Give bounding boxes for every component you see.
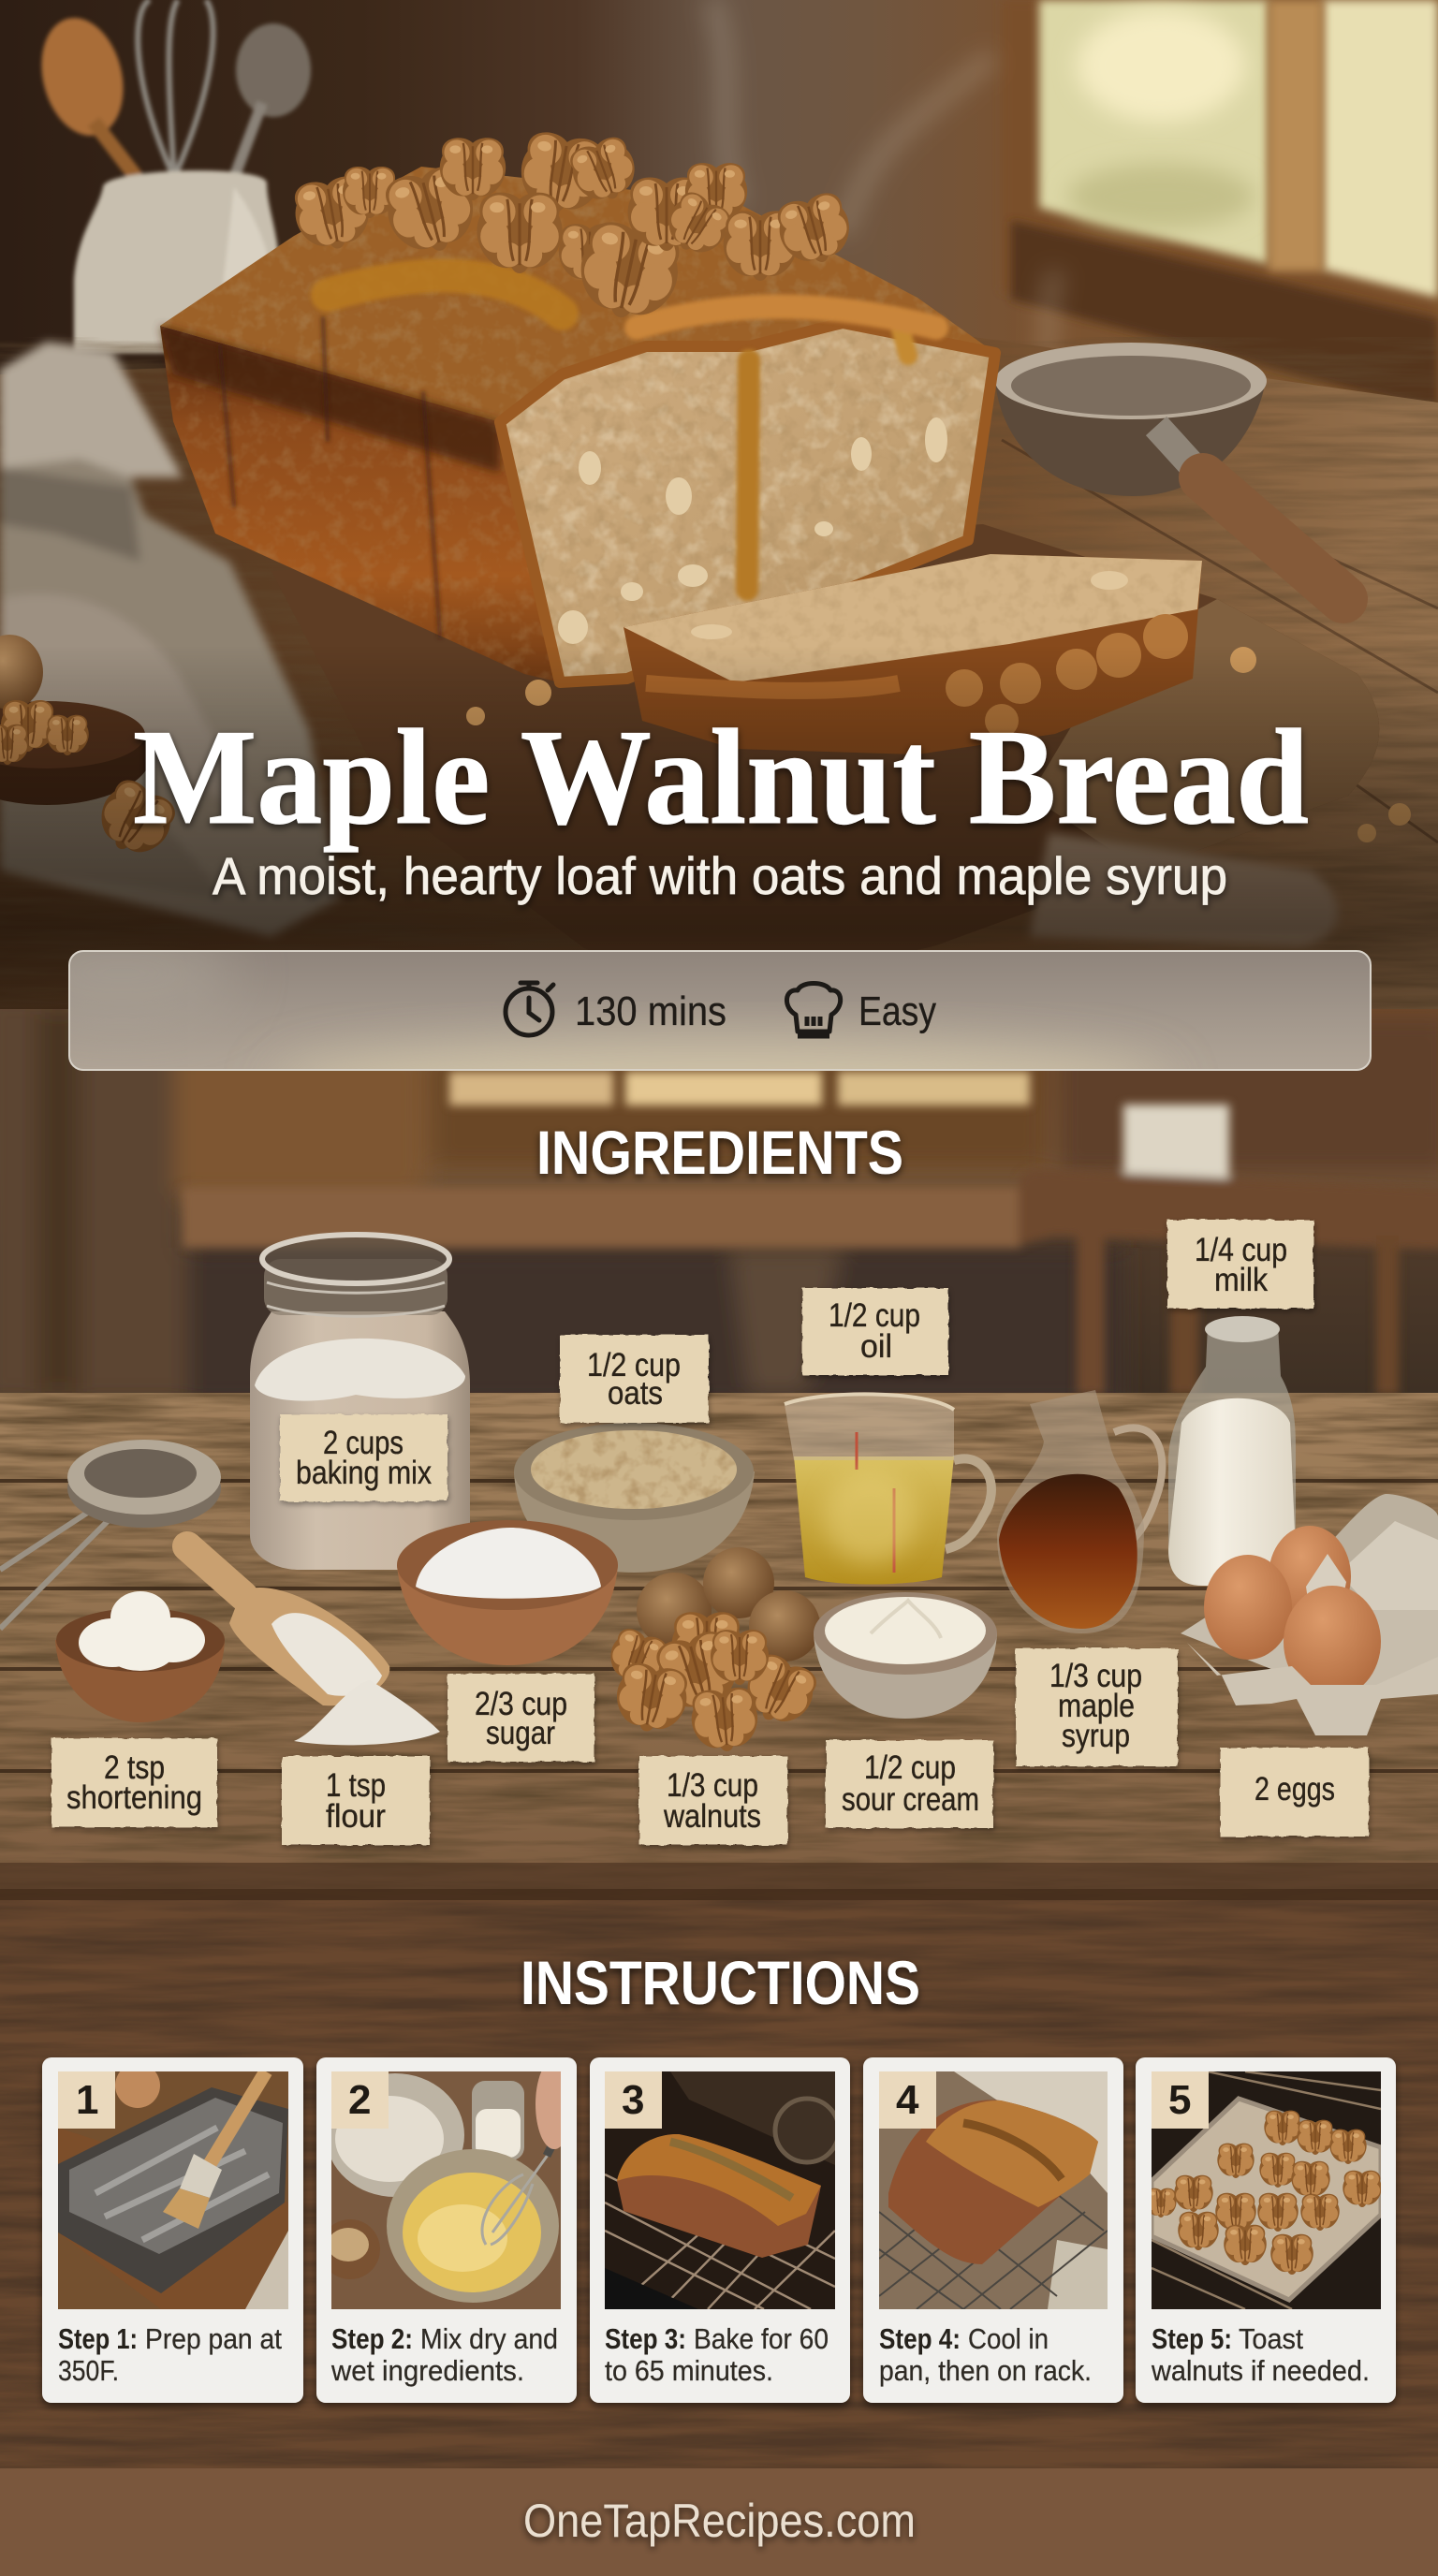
caption step 3: Step 3:: [605, 2322, 686, 2355]
number badge 5: 5: [1168, 2077, 1191, 2123]
table top: [0, 337, 1438, 1009]
utensils in crock: [30, 0, 311, 353]
label: 2/3 cup sugar: 2/3 cup: [475, 1686, 567, 1722]
label: 2 tsp shortening: [51, 1738, 217, 1827]
label: 1/2 cup oil: [802, 1288, 948, 1375]
step card 3: [590, 2057, 850, 2403]
step 1 image: greasing the pan: [58, 2071, 288, 2309]
caption step 1: 350F.: [58, 2354, 119, 2387]
caption step 1: Prep pan at: [145, 2322, 282, 2355]
label: 1/3 cup maple syrup: syrup: [1062, 1718, 1130, 1754]
label: 2 eggs: 2 eggs: [1255, 1771, 1335, 1808]
caption step 3: to 65 minutes.: [605, 2354, 773, 2387]
label: 1/4 cup milk: milk: [1214, 1262, 1268, 1298]
caption step 5: Step 5:: [1152, 2322, 1232, 2355]
label: 1/3 cup walnuts: [639, 1756, 787, 1845]
label: 1 tsp flour: [282, 1756, 430, 1845]
cut slice of bread: [624, 554, 1202, 754]
illustration: sour cream bowl: [814, 1592, 997, 1719]
cutting board: [363, 524, 1380, 950]
number badge 3: [605, 2071, 662, 2129]
towel: [0, 342, 339, 936]
saucepan with wooden handle: [995, 343, 1343, 599]
label: 1/2 cup sour cream: 1/2 cup: [864, 1749, 956, 1786]
illustration: maple syrup jug: [997, 1390, 1162, 1633]
step card 1: [42, 2057, 303, 2403]
crumbs: [466, 647, 1411, 842]
caption step 2: Step 2:: [331, 2322, 413, 2355]
step 5 image: toasting walnuts: [1152, 2071, 1381, 2309]
label: 1/4 cup milk: 1/4 cup: [1195, 1232, 1287, 1268]
title: Maple Walnut Bread: [133, 701, 1309, 853]
label: 1/3 cup walnuts: 1/3 cup: [667, 1767, 758, 1804]
number badge 2: 2: [348, 2077, 371, 2123]
label: 2 tsp shortening: shortening: [66, 1779, 202, 1816]
illustration: oats bowl: [514, 1423, 755, 1573]
footer band: [0, 2468, 1438, 2576]
icon: chef hat: [786, 983, 841, 1036]
illustration: measuring cup with oil: [785, 1394, 991, 1584]
number badge 2: [331, 2071, 389, 2129]
caption step 4: Cool in: [968, 2322, 1049, 2355]
number badge 4: 4: [896, 2077, 919, 2123]
label: 1/2 cup oats: 1/2 cup: [587, 1347, 681, 1383]
bread loaf: [160, 129, 995, 682]
label: 2/3 cup sugar: sugar: [486, 1715, 555, 1751]
label: 1 tsp flour: flour: [326, 1798, 386, 1835]
label: 1/3 cup maple syrup: maple: [1058, 1688, 1135, 1724]
label: 1/2 cup sour cream: sour cream: [842, 1781, 979, 1818]
label: 1/2 cup sour cream: [826, 1740, 993, 1828]
step 2 image: mixing batter: [331, 2071, 561, 2309]
caption step 3: Bake for 60: [694, 2322, 829, 2355]
caption step 2: Mix dry and: [420, 2322, 558, 2355]
illustration: flour pile: [294, 1680, 440, 1745]
text: time: 130 mins: [575, 988, 726, 1034]
caption step 4: pan, then on rack.: [879, 2354, 1092, 2387]
heading: ingredients: INGREDIENTS: [536, 1118, 903, 1187]
number badge 4: [879, 2071, 936, 2129]
label: 1/3 cup walnuts: walnuts: [663, 1798, 761, 1835]
illustration: tongs and jar lid: [0, 1440, 221, 1629]
caption step 1: Step 1:: [58, 2322, 138, 2355]
steam: [712, 0, 1058, 356]
label: 2/3 cup sugar: [448, 1674, 594, 1762]
walnut pieces in crumb: [558, 417, 947, 644]
number badge 3: 3: [622, 2077, 644, 2123]
heading: instructions: INSTRUCTIONS: [521, 1948, 920, 2017]
wooden table: [0, 1393, 1438, 1900]
caption step 1: [58, 2322, 282, 2387]
caption step 2: [330, 2322, 558, 2387]
caption step 5: walnuts if needed.: [1151, 2354, 1370, 2387]
illustration: wooden scoop with flour: [187, 1546, 389, 1705]
panel: instructions wood background: [0, 1895, 1438, 2469]
number badge 5: [1152, 2071, 1209, 2129]
footer website: OneTapRecipes.com: [523, 2495, 916, 2547]
icon: stopwatch: [506, 983, 553, 1035]
label: 2 cups baking mix: baking mix: [296, 1455, 432, 1491]
info bar: time and difficulty: [9, 927, 1371, 1128]
walnut topping: [290, 129, 857, 328]
illustration: shortening bowl: [55, 1591, 225, 1722]
panel: ingredients background: [0, 992, 1438, 1900]
illustration: sugar bowl: [397, 1520, 618, 1665]
illustration: egg carton with eggs: [1181, 1494, 1438, 1735]
subtitle: A moist, hearty loaf with oats and maple syrup: [213, 846, 1227, 905]
panel: hero photo of the loaf: [0, 0, 1438, 1009]
label: 2 tsp shortening: 2 tsp: [104, 1749, 165, 1786]
number badge 1: 1: [76, 2077, 98, 2123]
number badge 1: [58, 2071, 115, 2129]
illustration: milk bottle: [1168, 1316, 1296, 1586]
label: 1/2 cup oats: oats: [608, 1375, 663, 1412]
step 3 image: loaf in oven: [605, 2071, 835, 2309]
step card 2: [316, 2057, 577, 2403]
step card 5: [1136, 2057, 1396, 2403]
caption step 5: [1151, 2322, 1370, 2387]
illustration: walnuts: [603, 1547, 823, 1754]
window with bright panes: [1002, 0, 1438, 412]
label: 2 eggs: [1220, 1748, 1369, 1837]
label: 1/2 cup oats: [560, 1335, 709, 1423]
caption step 5: Toast: [1239, 2322, 1303, 2355]
label: 1 tsp flour: 1 tsp: [326, 1767, 386, 1804]
small walnut bowl: [0, 635, 183, 866]
text: difficulty: Easy: [858, 988, 936, 1034]
caption step 4: [879, 2322, 1092, 2387]
label: 2 cups baking mix: 2 cups: [323, 1425, 404, 1461]
label: 1/2 cup oil: oil: [860, 1328, 892, 1365]
label: 1/3 cup maple syrup: [1016, 1648, 1178, 1766]
caption step 3: [605, 2322, 829, 2387]
room blurred details: [0, 992, 1438, 1407]
label: 1/4 cup milk: [1167, 1220, 1313, 1309]
label: 2 cups baking mix: [280, 1414, 448, 1501]
label: 1/2 cup oil: 1/2 cup: [829, 1297, 920, 1334]
step 4 image: cooling on rack: [879, 2071, 1108, 2309]
label: 1/3 cup maple syrup: 1/3 cup: [1049, 1658, 1142, 1694]
caption step 2: wet ingredients.: [330, 2354, 524, 2387]
illustration: flour jar: [250, 1235, 470, 1570]
maple glaze drips: [220, 276, 936, 637]
caption step 4: Step 4:: [879, 2322, 961, 2355]
step card 4: [863, 2057, 1123, 2403]
